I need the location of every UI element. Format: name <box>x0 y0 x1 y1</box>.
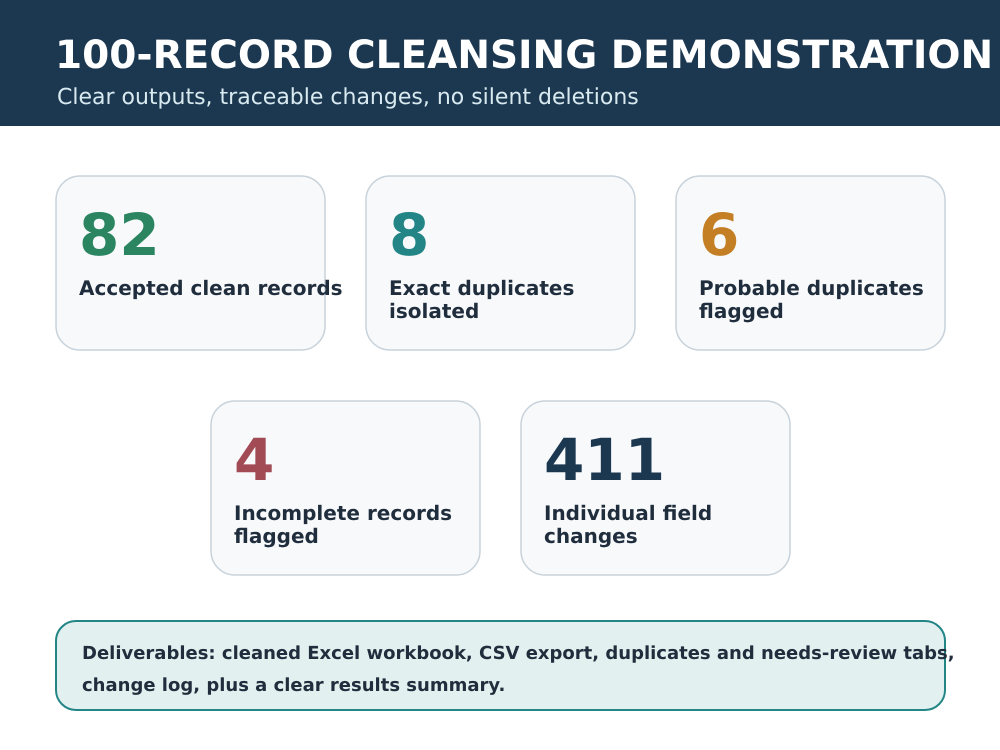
card: probable duplicates <box>676 176 945 350</box>
card: exact duplicates: Exact duplicates <box>389 276 574 300</box>
card: accepted clean records: Accepted clean records <box>79 276 343 300</box>
card: exact duplicates: isolated <box>389 299 479 323</box>
card: individual field changes <box>521 401 790 575</box>
card: probable duplicates: Probable duplicates <box>699 276 924 300</box>
header banner <box>0 0 1000 126</box>
card: incomplete records <box>211 401 480 575</box>
card: accepted clean records <box>56 176 343 350</box>
subtitle: Clear outputs, traceable changes, no silent deletions <box>57 85 639 110</box>
card: incomplete records: flagged <box>234 524 319 548</box>
card: probable duplicates: flagged <box>699 299 784 323</box>
deliverables callout: change log, plus a clear results summary. <box>82 675 505 696</box>
card: accepted clean records: 82 <box>79 201 160 269</box>
card: individual field changes: Individual field <box>544 501 712 525</box>
card: individual field changes: changes <box>544 524 638 548</box>
card: probable duplicates: 6 <box>699 201 739 269</box>
title: 100-RECORD CLEANSING DEMONSTRATION <box>55 33 993 78</box>
card: exact duplicates <box>366 176 635 350</box>
card: individual field changes: 411 <box>544 426 665 494</box>
deliverables callout: Deliverables: cleaned Excel workbook, CSV export, duplicates and needs-review tabs, <box>82 643 955 664</box>
card: exact duplicates: 8 <box>389 201 429 269</box>
deliverables callout <box>56 621 955 710</box>
card: incomplete records: 4 <box>234 426 274 494</box>
card: incomplete records: Incomplete records <box>234 501 452 525</box>
